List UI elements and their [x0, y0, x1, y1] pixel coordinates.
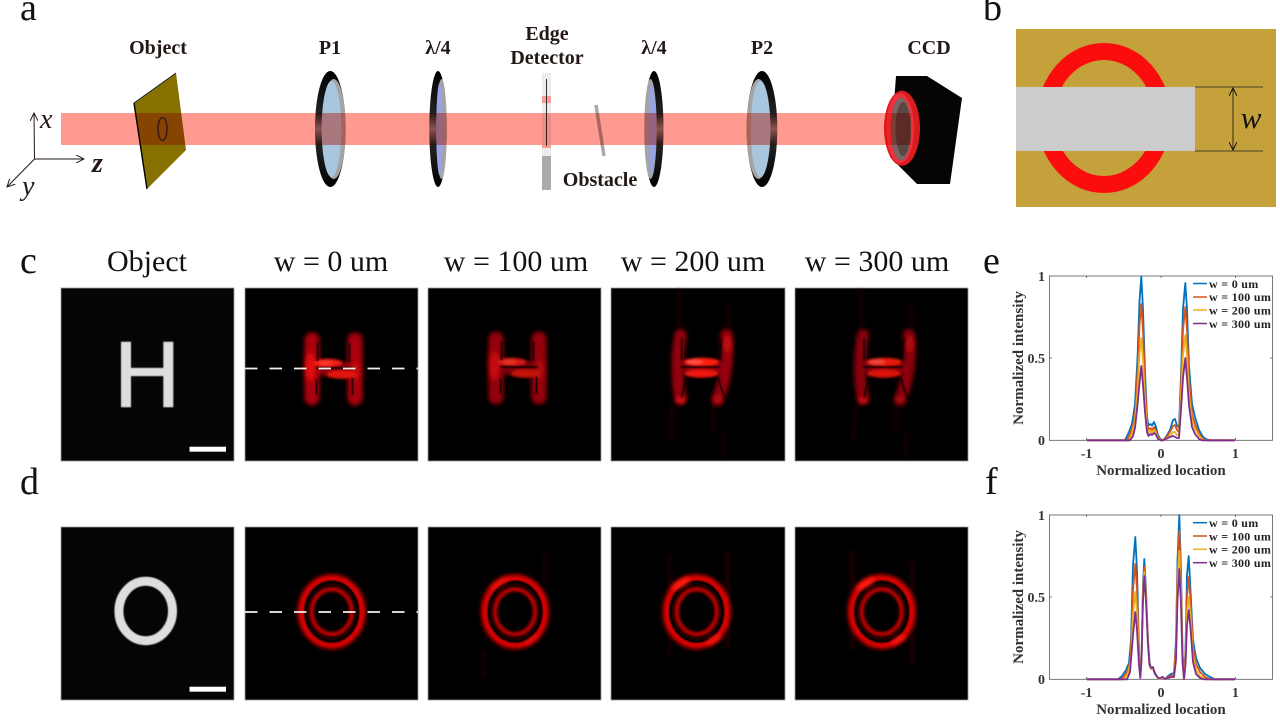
- H w=0 image: [245, 288, 418, 461]
- setup labels: Object: [129, 37, 187, 59]
- O object image: [61, 527, 234, 700]
- setup labels: Edge: [525, 23, 569, 45]
- H w=200 image: [611, 288, 785, 461]
- quarter wave plate 2: [644, 71, 664, 187]
- legend f: w = 200 um: [1209, 542, 1271, 556]
- legend f: w = 300 um: [1209, 556, 1271, 570]
- legend e: w = 100 um: [1209, 290, 1271, 304]
- O w=100 image: [428, 527, 601, 700]
- curves e: [1087, 276, 1235, 440]
- axes text e: 0: [1038, 434, 1045, 449]
- panel b: obstacle over ring object: w: [1233, 100, 1262, 135]
- axes text e: -1: [1081, 447, 1092, 462]
- H w=300 image: [795, 288, 968, 461]
- O w=0 image: [245, 527, 418, 700]
- axes text f: 1: [1232, 686, 1239, 701]
- axes text f: 1: [1038, 509, 1045, 524]
- O w=200 image: [611, 527, 785, 700]
- setup labels: P1: [319, 37, 341, 59]
- polarizer P1: [315, 71, 346, 187]
- coordinate axes: [7, 104, 103, 202]
- setup labels: λ/4: [425, 37, 451, 59]
- quarter wave plate 1: [429, 71, 447, 187]
- panel letters: c: [20, 240, 37, 282]
- column titles: w = 0 um: [274, 245, 388, 278]
- axes text e: 1: [1232, 447, 1239, 462]
- axes text e: 0.5: [1028, 352, 1045, 367]
- setup labels: P2: [751, 37, 773, 59]
- axes text f: Normalized location: [1096, 702, 1226, 718]
- legend f: w = 100 um: [1209, 530, 1271, 544]
- axes text f: Normalized intensity: [1011, 530, 1027, 664]
- H object image: [61, 288, 234, 461]
- panel letters: f: [985, 461, 998, 503]
- legend e: w = 0 um: [1209, 277, 1259, 291]
- curves f: [1087, 515, 1235, 679]
- axes text e: Normalized intensity: [1011, 291, 1027, 425]
- coordinate axes: x: [39, 104, 53, 135]
- legend e: w = 200 um: [1209, 304, 1271, 318]
- legend f: [1193, 516, 1271, 570]
- legend f: w = 0 um: [1209, 516, 1259, 530]
- axes text f: 0.5: [1028, 591, 1045, 606]
- axes text f: 0: [1158, 686, 1164, 701]
- column titles: w = 100 um: [444, 245, 588, 278]
- panel f: line chart for O: [1011, 509, 1272, 718]
- axes text f: [1011, 509, 1239, 718]
- axes text e: 0: [1158, 447, 1164, 462]
- laser beam: [61, 113, 911, 145]
- CCD camera: [884, 76, 962, 184]
- axes text e: 1: [1038, 270, 1045, 285]
- setup labels: [129, 23, 951, 191]
- panel letters: [20, 0, 1002, 503]
- obstacle: [596, 105, 604, 156]
- edge detector: [542, 73, 551, 190]
- axes text f: -1: [1081, 686, 1092, 701]
- O w=300 image: [795, 527, 968, 700]
- axes text f: 0: [1038, 673, 1045, 688]
- coordinate axes: z: [91, 148, 103, 179]
- coordinate axes: y: [19, 171, 35, 202]
- column titles: w = 200 um: [621, 245, 765, 278]
- panel e: line chart for H: [1011, 270, 1272, 479]
- setup labels: Detector: [510, 47, 584, 69]
- panel a: optical setup: [7, 23, 962, 202]
- H w=100 image: [428, 288, 601, 461]
- setup labels: Obstacle: [563, 169, 637, 191]
- panel d: letter O images: [61, 527, 968, 700]
- axes text e: [1011, 270, 1239, 479]
- panel b: obstacle over ring object: [1016, 29, 1276, 207]
- legend e: [1193, 277, 1271, 331]
- panel letters: e: [983, 240, 1000, 282]
- polarizer P2: [746, 71, 777, 187]
- column titles: w = 300 um: [805, 245, 949, 278]
- axes text e: Normalized location: [1096, 463, 1226, 479]
- column titles: [107, 245, 949, 278]
- panel c: letter H images: [61, 288, 968, 461]
- column titles: Object: [107, 245, 188, 278]
- object plate: [134, 73, 186, 189]
- legend e: w = 300 um: [1209, 317, 1271, 331]
- panel letters: d: [20, 461, 39, 503]
- setup labels: CCD: [907, 37, 951, 59]
- setup labels: λ/4: [641, 37, 667, 59]
